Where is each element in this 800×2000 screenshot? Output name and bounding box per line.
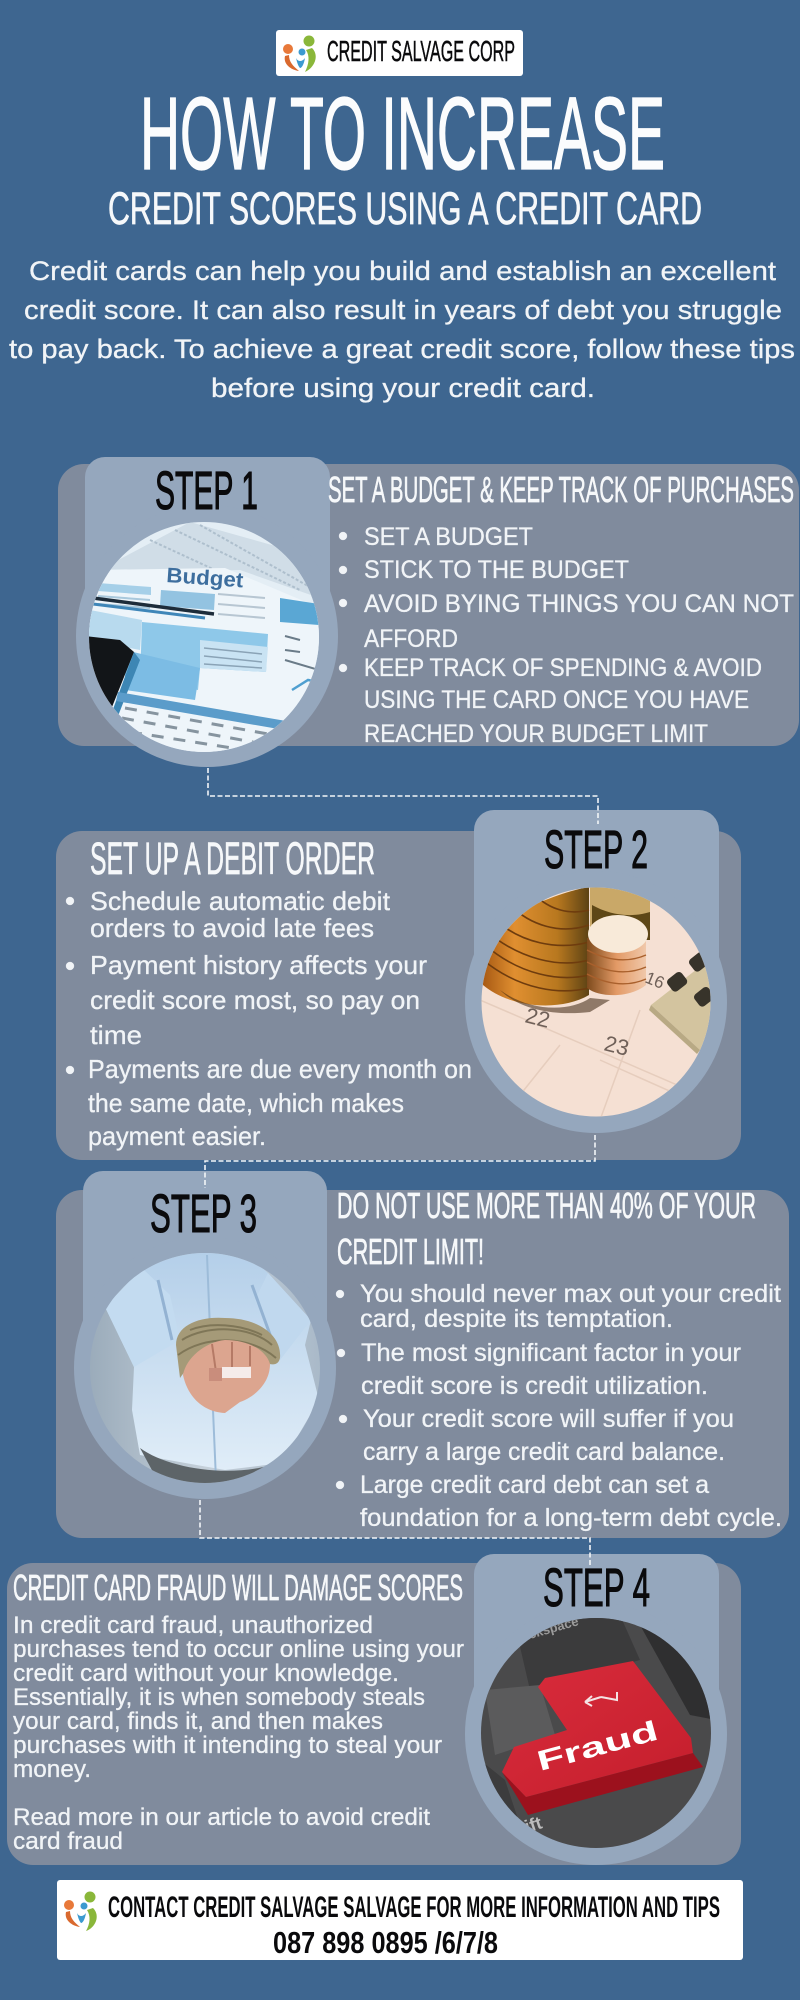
arrow: dashed connector step 3 to step 4 [200,1500,590,1565]
step 3 heading [337,1185,756,1272]
image: red fraud key: ift [522,1813,544,1837]
step 4 paragraph: credit card without your knowledge. [13,1660,399,1687]
step 1 bullet list: REACHED YOUR BUDGET LIMIT [364,720,708,748]
panel: step 4 credit card fraud [7,1554,741,1865]
step 2 heading: SET UP A DEBIT ORDER [90,833,375,884]
step 1 bullet list: AFFORD [364,625,458,653]
icon: logo people [283,36,316,72]
step 2 bullet list: credit score most, so pay on [90,985,420,1015]
step 1 bullet list: USING THE CARD ONCE YOU HAVE [364,686,749,714]
panel: step 1 set a budget [58,457,799,767]
step 4 paragraph: purchases with it intending to steal your [13,1732,442,1759]
step 2 label: STEP 2 [544,820,648,880]
step 3 bullet list: Your credit score will suffer if you [363,1405,734,1433]
step 3 bullet list: card, despite its temptation. [360,1305,673,1333]
step 3 bullet list: foundation for a long-term debt cycle. [360,1504,782,1532]
step 1 tab and oval [76,457,338,767]
step 3 bullet list: carry a large credit card balance. [363,1438,725,1466]
step 2 bullet list: Schedule automatic debit [90,886,391,916]
arrow: dashed connector step 2 to step 3 [205,1135,595,1188]
step 3 label: STEP 3 [150,1184,257,1244]
phone numbers: 087 898 0895 /6/7/8 [273,1925,498,1960]
contact banner [57,1880,743,1960]
step 4 label: STEP 4 [543,1558,650,1618]
step 4 paragraph: Read more in our article to avoid credit [13,1804,430,1831]
step 2 bullet list: the same date, which makes [88,1088,404,1118]
arrow: dashed connector step 1 to step 2 [208,768,598,824]
image: coins and calendar: 16 [643,968,667,993]
step 4 paragraph: money. [13,1756,91,1783]
image: coins and calendar: 22 [523,1003,553,1033]
step 4 paragraph: purchases tend to occur online using your [13,1636,464,1663]
step 3 bullet list [336,1280,782,1532]
step 2 bullet list: Payments are due every month on [88,1054,472,1084]
step 2 bullet list [66,886,472,1151]
logo badge: Credit Salvage Corp [276,30,523,76]
panel: step 2 set up a debit order [56,810,741,1160]
step 3 heading: CREDIT LIMIT! [337,1231,484,1272]
step 1 label: STEP 1 [155,461,258,521]
step 2 tab and oval [465,810,727,1133]
step 2 bullet list: payment easier. [88,1121,266,1151]
step 4 paragraph: your card, finds it, and then makes [13,1708,383,1735]
step 4 paragraph: card fraud [13,1828,123,1855]
step 4 paragraph: In credit card fraud, unauthorized [13,1612,373,1639]
image: coins and calendar [480,885,716,1120]
intro paragraph: credit score. It can also result in years of debt you struggle [24,295,782,325]
image: hands tied with rope [88,1250,323,1490]
intro paragraph [9,256,795,403]
step 1 bullet list [339,523,794,748]
intro paragraph: to pay back. To achieve a great credit score, follow these tips [9,334,795,364]
step 4 heading: CREDIT CARD FRAUD WILL DAMAGE SCORES [13,1567,463,1608]
step 1 bullet list: AVOID BYING THINGS YOU CAN NOT [364,590,794,618]
step 2 bullet list: Payment history affects your [90,950,427,980]
step 4 tab and oval [465,1554,727,1865]
step 4 paragraph [13,1612,464,1855]
step 3 bullet list: You should never max out your credit [360,1280,781,1308]
image: red fraud key: Fraud [534,1715,661,1777]
image: budget spreadsheet: Budget [166,564,244,592]
step 1 bullet list: KEEP TRACK OF SPENDING & AVOID [364,654,762,682]
image: red fraud key [478,1613,716,1851]
step 3 bullet list: The most significant factor in your [361,1339,741,1367]
step 3 tab and oval [74,1171,336,1499]
panel: step 3 credit limit [56,1171,789,1538]
icon: contact logo [64,1892,97,1931]
image: coins and calendar: 23 [602,1031,632,1061]
image: red fraud key: ackspace [520,1613,580,1644]
step 2 bullet list: time [90,1020,142,1050]
step 4 paragraph: Essentially, it is when somebody steals [13,1684,425,1711]
image: budget spreadsheet [85,520,325,755]
step 2 bullet list: orders to avoid late fees [90,913,374,943]
intro paragraph: before using your credit card. [211,373,595,403]
step 3 bullet list: Large credit card debt can set a [360,1471,709,1499]
logo wordmark: CREDIT SALVAGE CORP [327,36,515,68]
step 3 bullet list: credit score is credit utilization. [361,1372,708,1400]
step 1 bullet list: STICK TO THE BUDGET [364,556,629,584]
intro paragraph: Credit cards can help you build and establish an excellent [29,256,777,286]
step 1 bullet list: SET A BUDGET [364,523,533,551]
